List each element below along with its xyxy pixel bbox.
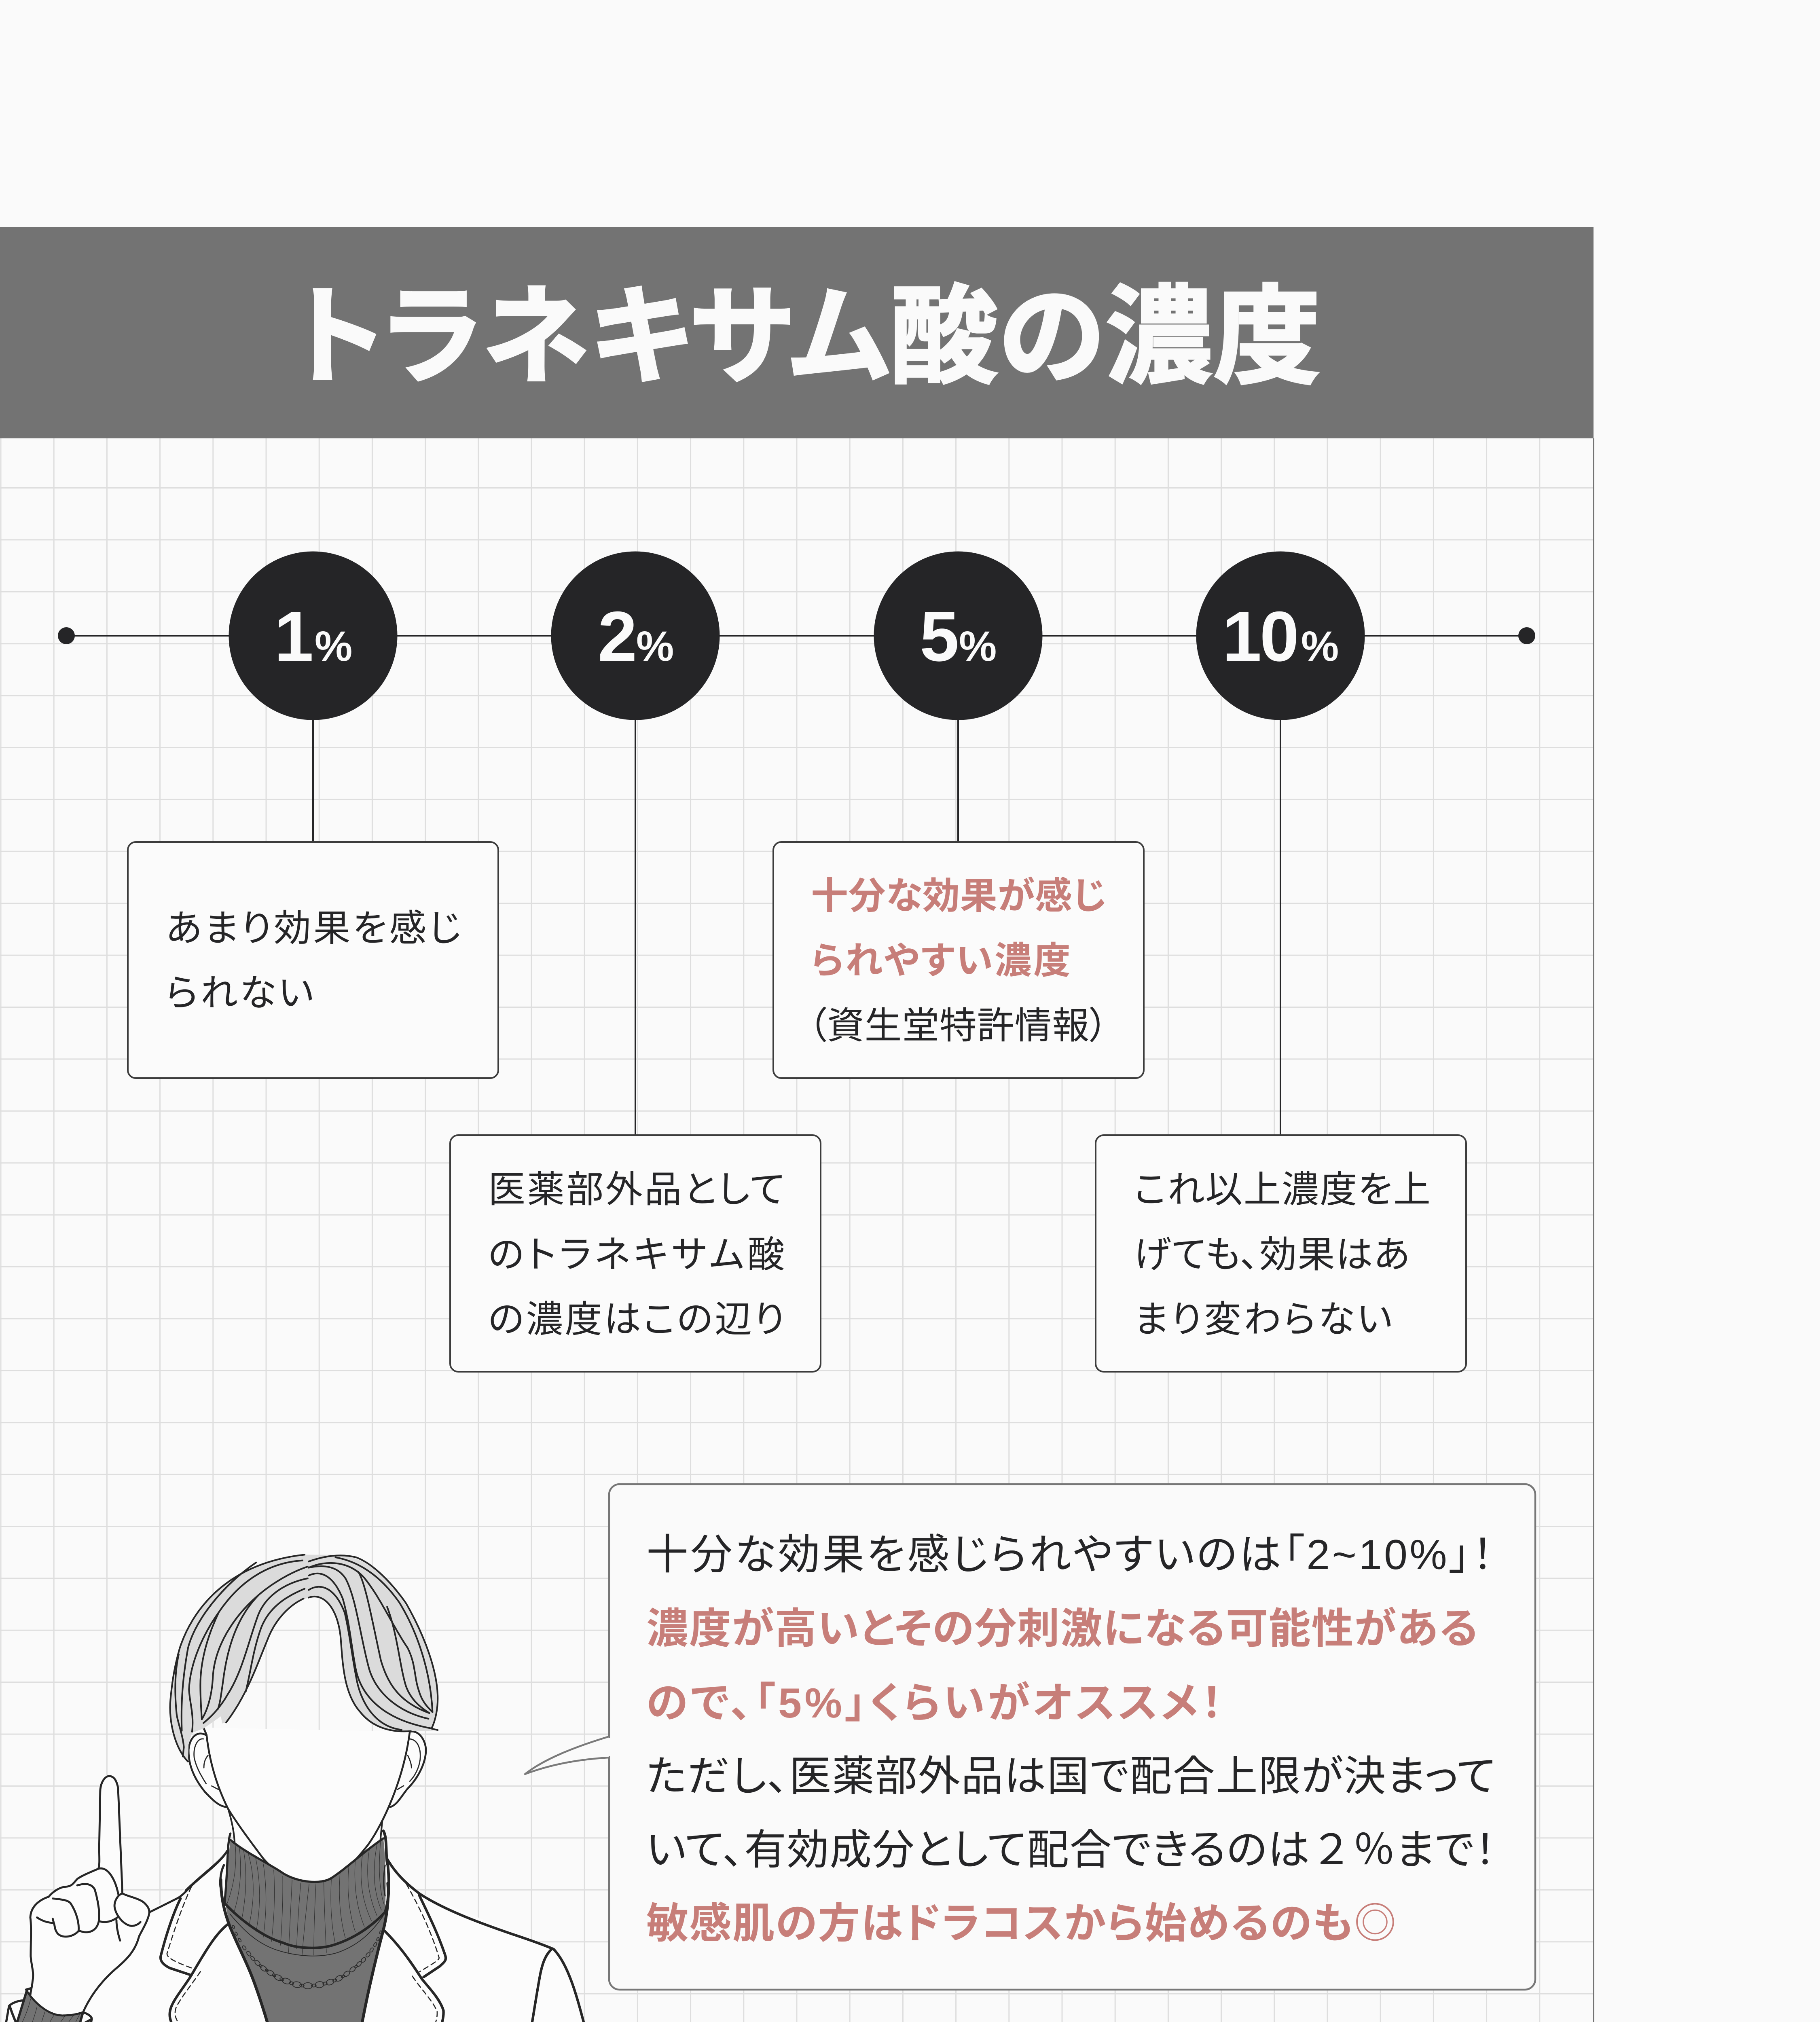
- box: 2% note: の濃度はこの辺り: [488, 1299, 785, 1340]
- bubble text: 敏感肌の方はドラコスから始めるのも◎: [646, 1900, 1396, 1947]
- box: 5% note: （資生堂特許情報）: [808, 1005, 1108, 1047]
- character illustration: [0, 1555, 590, 2022]
- bubble tail: [525, 1736, 609, 1774]
- box: 2% note: のトラネキサム酸: [488, 1234, 785, 1275]
- step: 1%: %: [315, 623, 352, 670]
- ears and neck: [188, 1728, 426, 1884]
- step: 5%: 5: [920, 597, 959, 676]
- box: 1% note: あまり効果を感じ: [166, 908, 461, 949]
- bubble text: ので、「5%」くらいがオススメ！: [646, 1680, 1222, 1727]
- box: 5% note: [773, 842, 1144, 1078]
- bubble text: ただし、医薬部外品は国で配合上限が決まって: [646, 1753, 1496, 1800]
- step: 10%: %: [1301, 623, 1339, 670]
- right shoulder and lapels: [385, 1858, 590, 2022]
- step: 1%: 1: [274, 597, 313, 676]
- step: 2%: [450, 552, 821, 1372]
- raised hand: [2, 1776, 149, 2022]
- body silhouette: [0, 1852, 590, 2022]
- step: 2%: 2: [598, 597, 637, 676]
- box: 10% note: これ以上濃度を上: [1134, 1169, 1431, 1210]
- face: [203, 1728, 410, 1884]
- box: 10% note: [1096, 1135, 1466, 1372]
- box: 10% note: げても、効果はあ: [1134, 1234, 1410, 1275]
- bubble text: [646, 1531, 1496, 1947]
- step: 10%: 10: [1222, 597, 1299, 676]
- necklace: [232, 1925, 382, 1989]
- hand finger lines: [37, 1868, 140, 1941]
- timeline axis: [58, 627, 1535, 644]
- sleeve cuff: [2, 2001, 92, 2022]
- box: 5% note: 十分な効果が感じ: [811, 876, 1106, 917]
- step: 2%: %: [636, 623, 674, 670]
- turtleneck collar: [186, 1831, 389, 1956]
- sweater body: [220, 1865, 388, 2022]
- collar ribs: [226, 1841, 384, 1955]
- title banner: [0, 227, 1594, 438]
- box: 10% note: まり変わらない: [1134, 1299, 1392, 1340]
- step: 1%: [128, 552, 498, 1078]
- bubble text: 濃度が高いとその分刺激になる可能性がある: [646, 1605, 1478, 1652]
- left lapels: [150, 1853, 229, 2022]
- bubble text: いて、有効成分として配合できるのは２％まで！: [646, 1827, 1496, 1874]
- box: 2% note: [450, 1135, 821, 1372]
- box: 1% note: [128, 842, 498, 1078]
- hand shape: [27, 1776, 149, 2016]
- hair: [170, 1555, 438, 1762]
- speech bubble: [525, 1484, 1535, 1990]
- box: 2% note: 医薬部外品として: [488, 1169, 785, 1210]
- step: 5%: %: [959, 623, 997, 670]
- title: トラネキサム酸の濃度: [293, 277, 1321, 397]
- panel border: [0, 438, 1820, 2022]
- box: 1% note: られない: [166, 973, 313, 1014]
- step: 10%: [1096, 552, 1466, 1372]
- box: 5% note: られやすい濃度: [811, 940, 1071, 981]
- step: 5%: [773, 552, 1144, 1078]
- bubble text: 十分な効果を感じられやすいのは「2~10%」！: [646, 1531, 1493, 1578]
